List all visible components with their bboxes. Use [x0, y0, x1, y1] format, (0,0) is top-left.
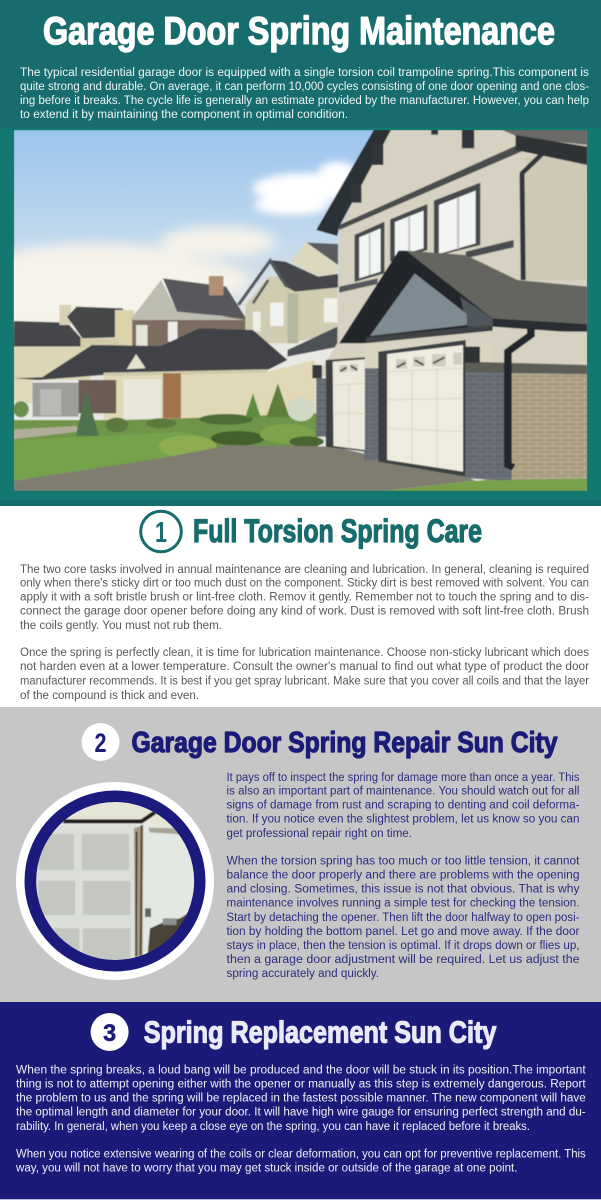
- section 1 text: manufacturer recommends. It is best if you get spray lubricant. Make sure that you cover all coils and that the layer: [20, 676, 589, 688]
- section 3 text: the problem to us and the spring will be replaced in the fastest possible manner. The new component will have: [16, 1092, 586, 1104]
- section 1 text: The two core tasks involved in annual maintenance are cleaning and lubrication. In general, cleaning is required: [20, 564, 589, 576]
- section 2 text: and closing. Sometimes, this issue is not that obvious. That is why: [226, 884, 580, 896]
- panel: spring replacement: [0, 1002, 601, 1200]
- intro paragraph: ing before it breaks. The cycle life is generally an estimate provided by the manufacturer. However, you can help: [20, 95, 589, 107]
- section 3 text: [15, 1065, 587, 1175]
- garage doors: [326, 357, 365, 452]
- front lawn strip: [383, 478, 587, 491]
- section 1 text: [20, 564, 589, 702]
- number badge 2: 2: [94, 728, 106, 758]
- section 1 text: not harden even at a lower temperature. Consult the owner's manual to find out what type of product the door: [20, 661, 589, 673]
- low roof house: [103, 360, 315, 422]
- intro paragraph: The typical residential garage door is equipped with a single torsion coil trampoline spring.This component is: [20, 67, 589, 79]
- number badge 3: 3: [103, 1020, 116, 1047]
- section 2 text: is also an important part of maintenance. You should watch out for all: [226, 786, 580, 798]
- section 2 text: stays in place, then the tension is optimal. If it drops down or flies up,: [226, 940, 580, 952]
- section 1 text: the coils gently. You must not rub them.: [20, 620, 222, 632]
- section 3 text: When the spring breaks, a loud bang will be produced and the door will be stuck in its position.The important: [16, 1065, 587, 1077]
- section 1 text: of the compound is thick and even.: [20, 690, 199, 702]
- number badge 2: [82, 723, 120, 761]
- lawns and shrubs: [14, 413, 318, 453]
- section 2 text: Start by detaching the opener. Then lift the door halfway to open posi-: [226, 912, 580, 924]
- heading 3: Spring Replacement Sun City: [144, 1015, 497, 1050]
- downspout upper: [522, 150, 546, 280]
- section 2 text: get professional repair right on time.: [226, 828, 412, 840]
- panel: header: [0, 0, 601, 506]
- circular photo: worn garage door: [16, 782, 214, 980]
- upper windows: [355, 183, 480, 282]
- driveway: [14, 445, 475, 491]
- section 2 text: When the torsion spring has too much or too little tension, it cannot: [226, 856, 580, 868]
- section 3 text: When you notice extensive wearing of the coils or clear deformation, you can opt for preventive replacement. This: [16, 1149, 586, 1161]
- section 2 text: signs of damage from rust and scraping to denting and coil deforma-: [226, 800, 580, 812]
- third house: [132, 317, 247, 348]
- section 2 text: then a garage door adjustment will be required. Let us adjust the: [226, 954, 580, 966]
- section 2 text: [226, 772, 580, 980]
- garage gable roof: [406, 251, 587, 324]
- section 2 text: tion by holding the bottom panel. Let go and move away. If the door: [226, 926, 580, 938]
- section 3 text: thing is not to attempt opening either with the opener or manually as this step is extremely dangerous. Report: [16, 1078, 587, 1090]
- far left house: [14, 321, 89, 347]
- number badge 3: [91, 1013, 129, 1051]
- section 3 text: way, you will not have to worry that you may get stuck inside or outside of the garage at one point.: [15, 1163, 518, 1175]
- section 3 text: the optimal length and diameter for your door. It will have high wire gauge for ensuring perfect strength and du-: [16, 1107, 586, 1119]
- intro paragraph: quite strong and durable. On average, it can perform 10,000 cycles consisting of one door opening and one clos-: [20, 81, 589, 93]
- section 3 text: rability. In general, when you keep a close eye on the spring, you can have it replaced before it breaks.: [16, 1121, 530, 1133]
- fourth house: [245, 273, 337, 343]
- number badge 1: [141, 511, 181, 552]
- intro paragraph: to extend it by maintaining the component in optimal condition.: [20, 109, 348, 121]
- panel: full torsion spring care: [0, 506, 601, 707]
- downspout lower: [508, 328, 531, 467]
- section 1 text: apply it with a soft bristle brush or lint-free cloth. Remov it gently. Remember not to touch the spring and to dis-: [20, 592, 589, 604]
- main house wall: [316, 130, 587, 377]
- lower walls: [562, 330, 588, 334]
- section 1 text: only when there's sticky dirt or too much dust on the component. Sticky dirt is best removed with solvent. You can: [20, 578, 589, 590]
- number badge 1: 1: [155, 517, 167, 549]
- intro paragraph: [20, 67, 589, 121]
- section 2 text: It pays off to inspect the spring for damage more than once a year. This: [226, 772, 580, 784]
- section 2 text: spring accurately and quickly.: [226, 968, 379, 980]
- section 2 text: tion. If you notice even the slightest problem, let us know so you can: [226, 814, 580, 826]
- section 2 text: maintenance involves running a simple test for checking the tension.: [226, 898, 580, 910]
- section 2 text: balance the door properly and there are problems with the opening: [226, 870, 580, 882]
- panel: garage door spring repair: [0, 707, 601, 1003]
- photo: suburban houses with garage doors: [0, 130, 587, 491]
- heading 1: Full Torsion Spring Care: [193, 513, 482, 549]
- section 1 text: Once the spring is perfectly clean, it is time for lubrication maintenance. Choose non-sticky lubricant which does: [20, 647, 589, 659]
- section 1 text: connect the garage door opener before doing any kind of work. Dust is removed with soft lint-free cloth. Brush: [20, 606, 589, 618]
